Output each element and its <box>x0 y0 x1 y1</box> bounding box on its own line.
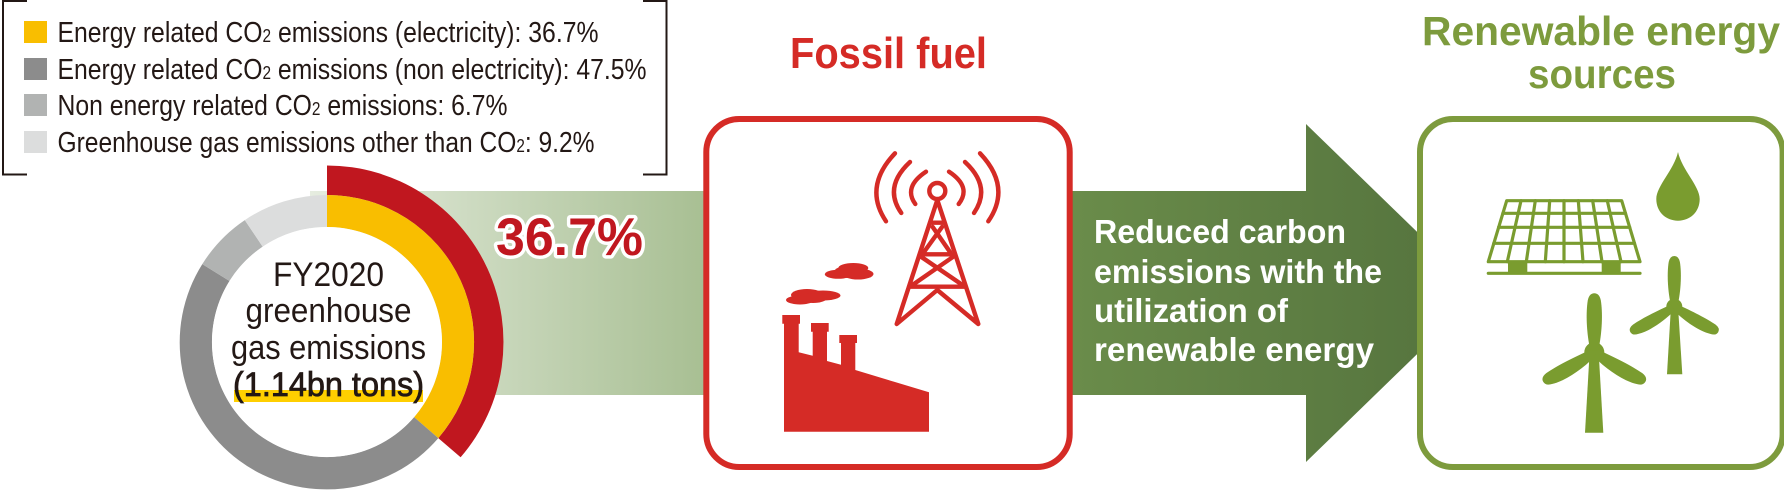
legend item: non electricity: Energy related CO2 emissions (non electricity): 47.5% <box>58 54 646 86</box>
icon: smoke <box>786 263 874 304</box>
arrow label <box>1094 213 1382 368</box>
arrow label: renewable energy <box>1094 331 1375 368</box>
donut centre label: gas emissions <box>231 329 426 367</box>
segment: other gases <box>245 195 327 247</box>
donut chart <box>180 166 503 489</box>
donut centre <box>212 227 442 457</box>
heading: renewable energy sources <box>1422 8 1780 97</box>
legend item: other gases: Greenhouse gas emissions other than CO2: 9.2% <box>58 127 594 159</box>
donut centre label: greenhouse <box>246 292 412 330</box>
arrow: reduced carbon emissions <box>1070 124 1480 462</box>
light green band from donut to fossil fuel box <box>310 191 706 395</box>
segment: non energy <box>202 220 263 281</box>
heading: renewable energy sources: Renewable energy <box>1422 8 1780 54</box>
legend panel <box>3 1 666 174</box>
heading: renewable energy sources: sources <box>1528 51 1676 97</box>
panel frame <box>1420 119 1783 467</box>
arrow label: Reduced carbon <box>1094 213 1346 250</box>
percentage callout: 36.7% <box>496 208 643 267</box>
icon: factory <box>782 315 929 432</box>
legend item: electricity: Energy related CO2 emissions (electricity): 36.7% <box>58 17 598 49</box>
legend bracket <box>3 1 666 174</box>
icon: water drop <box>1656 152 1700 221</box>
icon: small wind turbine <box>1628 256 1721 374</box>
donut centre label <box>231 256 426 404</box>
icon: large wind turbine <box>1540 293 1649 433</box>
segment: outer red highlight <box>327 166 503 457</box>
panel frame <box>706 119 1070 467</box>
panel: renewable energy <box>1420 119 1783 467</box>
arrow label: emissions with the <box>1094 253 1382 290</box>
icon: transmission tower <box>876 153 998 324</box>
segment: electricity <box>327 195 474 438</box>
segment: non electricity <box>180 264 438 489</box>
panel: fossil fuel <box>706 119 1070 467</box>
icon: solar panel <box>1488 201 1640 273</box>
arrow label: utilization of <box>1094 292 1289 329</box>
legend item: non energy: Non energy related CO2 emissions: 6.7% <box>58 90 508 122</box>
donut centre label: FY2020 <box>273 256 384 294</box>
heading: fossil fuel: Fossil fuel <box>790 29 987 78</box>
donut centre label: (1.14bn tons) <box>233 366 424 404</box>
